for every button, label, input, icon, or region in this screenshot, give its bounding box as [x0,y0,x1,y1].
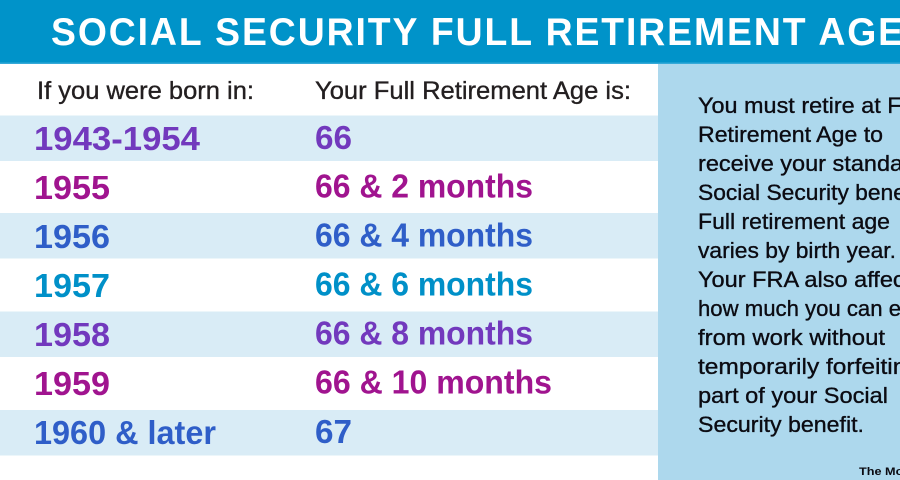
row: 1958: 66 & 8 months [315,316,533,352]
side panel [658,64,900,480]
row: 1957: 1957 [34,268,110,305]
row: 1960 & later [0,410,658,456]
side panel explanation text: Security benefit. [698,412,864,437]
row: 1956: 1956 [34,219,110,256]
side panel explanation text: Retirement Age to [698,122,883,147]
row: 1958 [0,312,658,357]
row: 1957: 66 & 6 months [315,266,533,304]
row: 1943-1954: 1943-1954 [34,121,200,158]
side panel explanation text [698,93,900,437]
row: 1956 [0,213,658,258]
table rows [0,116,658,456]
row: 1955: 66 & 2 months [315,168,533,206]
side panel explanation text: part of your Social [698,383,888,408]
side panel explanation text: from work without [698,325,886,350]
table column headings [37,77,631,105]
side panel explanation text: varies by birth year. [698,238,896,263]
row: 1943-1954 [0,116,658,161]
row: 1959 [34,364,552,403]
row: 1958: 1958 [34,317,110,354]
row: 1960 & later: 67 [315,414,352,451]
row: 1956: 66 & 4 months [315,218,533,254]
row: 1955 [34,168,533,207]
row: 1960 & later: 1960 & later [34,415,216,452]
table column headings: Your Full Retirement Age is: [315,77,631,105]
row: 1959: 66 & 10 months [315,364,552,402]
row: 1943-1954: 66 [315,120,352,157]
side panel explanation text: temporarily forfeiting [698,354,900,379]
table column headings: If you were born in: [37,77,254,105]
row: 1957 [34,266,533,305]
row: 1955: 1955 [34,170,110,207]
title banner [0,0,900,64]
side panel explanation text: Full retirement age [698,209,890,234]
row: 1959: 1959 [34,366,110,403]
